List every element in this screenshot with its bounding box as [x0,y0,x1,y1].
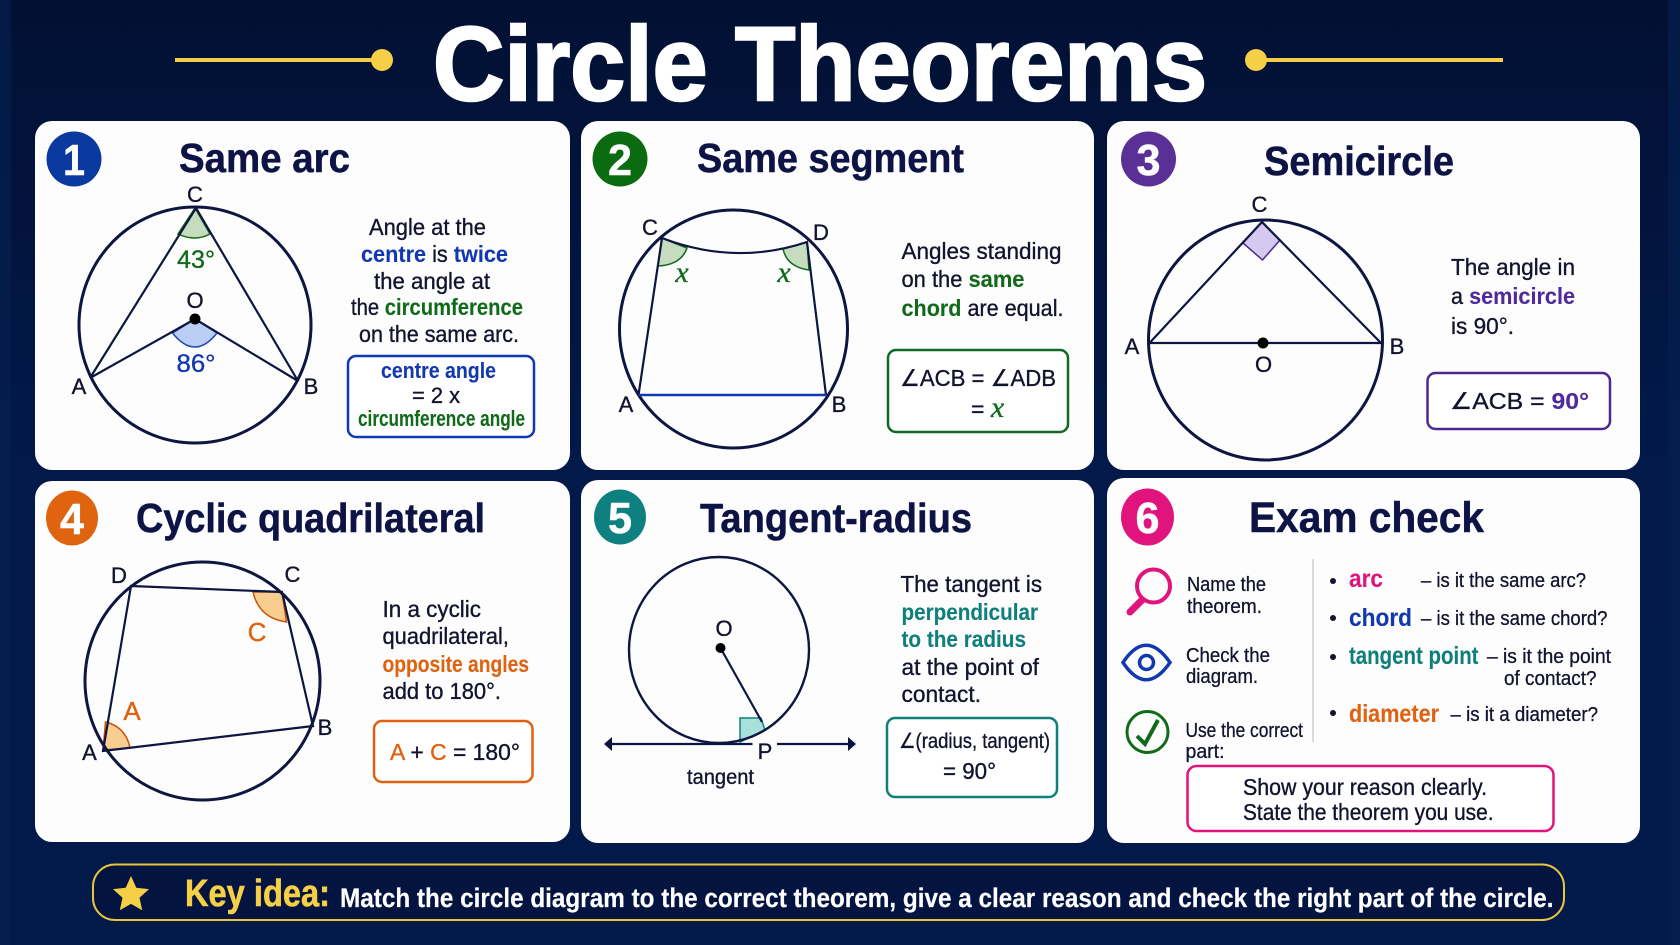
diagram: angle in a semicircle: C [1252,192,1268,217]
reminder box: Show your reason clearly. [1243,774,1487,800]
panel: same segment [581,121,1094,470]
explanation text: Angle at the [369,214,486,240]
diagram: angle at centre and circumference: 43° [177,246,215,274]
explanation text [902,238,1064,321]
diagram: tangent and radius at P: tangent [687,766,754,789]
formula box: = 2 x [412,383,460,408]
step: check the diagram: Check the [1186,645,1270,667]
badge 5: 5 [608,494,632,543]
badge 1 [46,132,102,186]
title: Circle Theorems [433,6,1207,123]
diagram: angle at centre and circumference: A [72,374,87,399]
explanation text: a semicircle [1451,283,1575,309]
explanation text: Angles standing [902,238,1062,264]
explanation text: at the point of [902,654,1040,680]
badge 6 [1121,488,1174,546]
diagram: quadrilateral in a circle: A [123,696,141,726]
checklist: tangent point: of contact? [1504,668,1596,690]
badge 3 [1121,132,1176,186]
heading: exam check: Exam check [1249,494,1484,542]
icon: eye [1123,645,1170,680]
diagram: tangent and radius at P: O [715,616,733,641]
panel: tangent-radius [581,480,1094,843]
explanation text: the angle at [374,268,491,294]
diagram: angles on the same chord: x [776,256,791,289]
explanation text [351,214,523,347]
formula box: A + C = 180° [390,739,520,765]
checklist: chord [1330,604,1608,632]
key idea sentence: Match the circle diagram to the correct theorem, give a clear reason and check the right part of the circle. [340,883,1554,913]
diagram: quadrilateral in a circle: B [318,715,332,740]
formula box [888,350,1068,432]
diagram: tangent and radius at P [604,557,856,789]
explanation text: opposite angles [382,651,529,677]
heading: cyclic quadrilateral: Cyclic quadrilateral [136,495,485,541]
panel: same arc [35,121,570,470]
badge 6: 6 [1136,494,1160,543]
icon: magnifying glass [1130,570,1170,612]
reminder box [1188,766,1554,831]
diagram: quadrilateral in a circle [82,562,332,800]
explanation text: the circumference [351,294,523,320]
formula box: circumference angle [358,406,525,431]
checklist: arc [1330,565,1586,593]
diagram: angle at centre and circumference: B [304,374,318,399]
formula box [374,721,532,782]
formula box [348,356,534,437]
heading: same segment: Same segment [697,135,964,181]
explanation text: The tangent is [900,571,1042,597]
checklist: arc: arc [1349,565,1383,593]
explanation text: add to 180°. [382,678,501,704]
checklist: tangent point: – is it the point [1487,646,1611,668]
heading: same arc: Same arc [179,135,350,181]
checklist: tangent point [1330,642,1611,690]
step: use the correct part: part: [1186,741,1224,763]
formula box: = 90° [943,758,996,784]
diagram: quadrilateral in a circle: D [111,563,127,588]
diagram: angle at centre and circumference: 86° [176,350,216,378]
panel: exam check [1107,478,1640,843]
diagram: angle at centre and circumference: C [187,182,203,207]
diagram: quadrilateral in a circle: C [248,617,266,647]
diagram: angle in a semicircle: O [1255,352,1272,377]
diagram: angle in a semicircle: B [1390,334,1404,359]
diagram: angle at centre and circumference: O [186,288,204,313]
formula box: = x [971,391,1005,424]
formula box: centre angle [381,358,496,383]
checklist: chord: chord [1349,604,1412,632]
checklist: tangent point: tangent point [1349,642,1479,670]
panel: semicircle [1107,121,1640,470]
diagram: angles on the same chord: x [674,256,689,289]
diagram: angles on the same chord: D [813,220,829,245]
key idea banner [93,864,1564,920]
diagram: quadrilateral in a circle: C [285,562,301,587]
explanation text: The angle in [1451,254,1575,280]
explanation text: centre is twice [361,241,508,267]
heading: semicircle: Semicircle [1264,138,1454,184]
explanation text: to the radius [902,626,1026,652]
formula box [887,718,1057,797]
checklist: diameter: – is it a diameter? [1450,704,1598,726]
diagram: tangent and radius at P: P [758,739,772,764]
badge 2 [592,132,648,186]
formula box: ∠ACB = ∠ADB [900,365,1056,391]
heading: tangent-radius: Tangent-radius [700,495,972,541]
diagram: angles on the same chord: B [832,392,846,417]
formula box: ∠(radius, tangent) [899,730,1050,753]
diagram: angle in a semicircle [1125,192,1404,460]
badge 1: 1 [63,136,85,185]
badge 4: 4 [60,495,85,544]
explanation text: perpendicular [902,599,1038,625]
formula box [1428,373,1610,429]
badge 2: 2 [608,136,632,185]
icon: star [113,876,149,910]
explanation text: contact. [902,681,981,707]
panel: cyclic quadrilateral [35,481,570,842]
diagram: angle in a semicircle: A [1125,334,1140,359]
step: check the diagram [1186,645,1270,688]
explanation text [382,596,529,704]
explanation text: In a cyclic [382,596,481,622]
step: use the correct part [1186,720,1303,763]
title ornament: left line and dot [175,49,393,71]
key idea label: Key idea: [185,873,330,915]
checklist: diameter: diameter [1349,700,1439,728]
badge 5 [594,490,646,544]
explanation text: quadrilateral, [382,623,509,649]
explanation text [1451,254,1575,339]
explanation text: on the same arc. [359,321,519,347]
explanation text: is 90°. [1451,313,1514,339]
formula box: ∠ACB = 90° [1450,388,1589,414]
badge 3: 3 [1136,136,1160,185]
explanation text: chord are equal. [902,295,1064,321]
checklist: chord: – is it the same chord? [1421,608,1608,630]
diagram: angles on the same chord [619,210,848,448]
explanation text [900,571,1042,707]
checklist: arc: – is it the same arc? [1421,570,1586,592]
step: use the correct part: Use the correct [1186,720,1303,742]
badge 4 [46,490,98,546]
reminder box: State the theorem you use. [1243,799,1494,825]
diagram: angles on the same chord: C [642,215,658,240]
diagram: angle at centre and circumference [72,182,318,443]
step: name the theorem: Name the [1187,574,1266,596]
title ornament: right line and dot [1245,49,1503,71]
diagram: angles on the same chord: A [619,392,634,417]
checklist: diameter [1330,700,1598,728]
step: name the theorem: theorem. [1187,596,1262,618]
step: check the diagram: diagram. [1186,666,1258,688]
step: name the theorem [1187,574,1266,618]
diagram: quadrilateral in a circle: A [82,740,97,765]
icon: check mark [1127,712,1168,752]
explanation text: on the same [902,266,1024,292]
